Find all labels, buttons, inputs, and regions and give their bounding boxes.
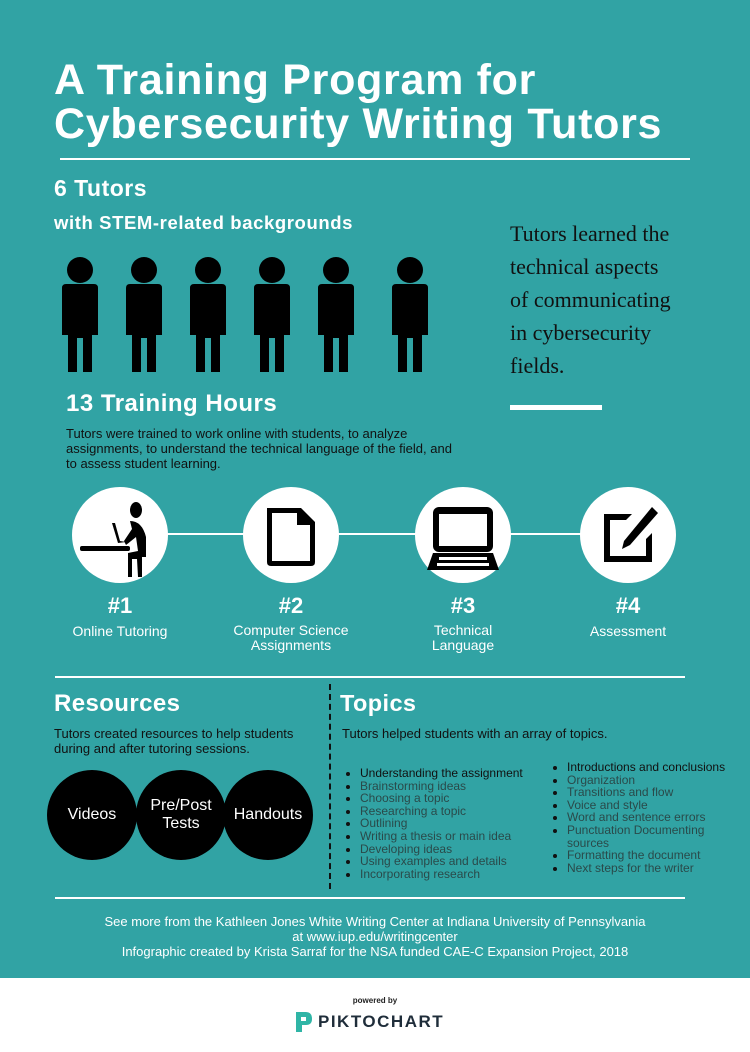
heading: Resources: [54, 690, 180, 717]
list column 1: Understanding the assignment: [360, 766, 523, 780]
list column 2: Organization: [567, 773, 635, 787]
footer credits: at www.iup.edu/writingcenter: [292, 929, 458, 944]
footer credits: [104, 914, 646, 959]
label: [233, 593, 349, 653]
label: Computer Science Assignments: [233, 622, 349, 653]
list column 2: [553, 760, 725, 875]
list column 1: [346, 766, 523, 881]
list column 1: Choosing a topic: [360, 791, 449, 805]
label: [590, 593, 666, 639]
label: #4: [616, 593, 640, 618]
list column 2: Word and sentence errors: [567, 810, 706, 824]
label: #3: [451, 593, 475, 618]
list column 1: Using examples and details: [360, 854, 507, 868]
quote text: in cybersecurity: [510, 320, 651, 345]
label: [432, 593, 494, 653]
quote text: [510, 221, 671, 378]
quote text: Tutors learned the: [510, 221, 669, 246]
footer credits: Infographic created by Krista Sarraf for the NSA funded CAE-C Expansion Project, 2018: [122, 944, 628, 959]
list column 1: Developing ideas: [360, 842, 452, 856]
panel: topics: [340, 690, 725, 881]
text: Tutors helped students with an array of topics.: [342, 726, 607, 741]
list column 2: Formatting the document: [567, 848, 700, 862]
list column 2: Voice and style: [567, 798, 648, 812]
heading: training hours: 13 Training Hours: [66, 390, 277, 417]
title: [54, 56, 662, 148]
icon: online tutoring: [72, 487, 168, 583]
quote text: of communicating: [510, 287, 671, 312]
heading: 6 tutors: 6 Tutors: [54, 175, 147, 201]
step 2: [233, 487, 349, 653]
list column 1: Writing a thesis or main idea: [360, 829, 511, 843]
label: #1: [108, 593, 132, 618]
circles: resource types: [47, 770, 313, 860]
text: Tutors created resources to help students during and after tutoring sessions.: [54, 726, 293, 756]
list column 1: Outlining: [360, 816, 407, 830]
list column 1: Researching a topic: [360, 804, 466, 818]
title: A Training Program for: [54, 56, 536, 104]
title: Cybersecurity Writing Tutors: [54, 100, 662, 148]
label: #2: [279, 593, 303, 618]
heading: Topics: [340, 690, 416, 716]
list column 1: Incorporating research: [360, 867, 480, 881]
step 4: [580, 487, 676, 639]
icon: edit: [580, 487, 676, 583]
panel: resources: [47, 690, 313, 860]
list column 2: Transitions and flow: [567, 785, 673, 799]
circles: resource types: Tests: [162, 815, 200, 832]
icon: document: [243, 487, 339, 583]
label: [73, 593, 167, 639]
icon: laptop: [415, 487, 511, 583]
footer: piktochart: PIKTOCHART: [318, 1012, 444, 1031]
label: Assessment: [590, 623, 666, 639]
circles: resource types: Videos: [68, 806, 116, 823]
list column 2: Introductions and conclusions: [567, 760, 725, 774]
label: Technical Language: [432, 622, 494, 653]
list column 1: Brainstorming ideas: [360, 779, 466, 793]
circles: resource types: Pre/Post: [150, 797, 212, 814]
list column 2: sources: [567, 836, 609, 850]
step 3: [415, 487, 511, 653]
list column 2: Punctuation Documenting: [567, 823, 704, 837]
footer credits: See more from the Kathleen Jones White Writing Center at Indiana University of Pennsylvania: [104, 914, 645, 929]
icons: six tutors: [62, 257, 428, 372]
subheading: with STEM-related backgrounds: [54, 212, 353, 233]
text: training description: Tutors were trained to work online with students, to analyze assignments, to understand the technical language of the field, and to assess student learning.: [66, 426, 452, 471]
footer: piktochart: [0, 978, 750, 1052]
label: Online Tutoring: [73, 623, 167, 639]
footer: piktochart: powered by: [353, 996, 397, 1005]
circles: resource types: Handouts: [234, 806, 302, 823]
quote text: technical aspects: [510, 254, 658, 279]
list column 2: Next steps for the writer: [567, 861, 694, 875]
step 1: [72, 487, 168, 639]
quote text: fields.: [510, 353, 564, 378]
